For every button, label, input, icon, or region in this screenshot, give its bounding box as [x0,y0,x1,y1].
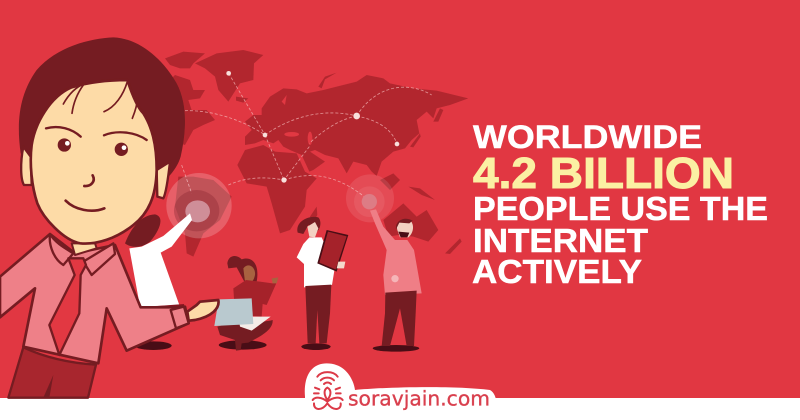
headline line: worldwide: WORLDWIDE [473,119,702,155]
internet route lines [182,73,432,200]
eyes [58,138,128,156]
left ear [21,147,32,185]
face [31,80,157,244]
shirt torso and arms [0,234,189,363]
logo white backing [305,363,496,418]
hair strands [63,82,137,118]
ripple: Asia-Pacific [346,174,394,222]
logo icon [313,372,343,409]
cartoon man hair [19,37,185,188]
figures group [135,209,422,352]
hand [187,300,219,321]
shirt cuff [171,307,189,328]
inland seas [282,95,312,145]
pants crease [43,375,53,398]
neck [72,243,97,255]
figure shadows [135,340,419,352]
smile [66,201,104,211]
right ear [157,162,170,198]
logo: soravjain.com [305,363,496,418]
world map [165,50,468,257]
headline text [472,119,768,290]
figure: seated woman with laptop [214,256,278,351]
eyebrows [46,127,147,140]
figure: man pointing at map [370,209,422,346]
figure: standing person with tablet [297,217,348,343]
headline line: people use the: PEOPLE USE THE [473,190,768,227]
headline line: internet: INTERNET [473,222,648,259]
headline line: 4.2 billion: 4.2 BILLION [473,149,734,198]
route nodes [226,71,399,183]
logo wordmark: soravjain.com [348,387,490,411]
shirt collar [50,234,115,275]
necktie [49,258,86,355]
cartoon man with pointing woman [0,37,219,398]
continents [165,50,468,257]
nose [84,175,94,186]
ripple: South America [166,173,232,238]
pants [8,347,96,398]
figure: woman in white pointing at map [125,213,192,315]
headline line: actively: ACTIVELY [472,253,642,290]
